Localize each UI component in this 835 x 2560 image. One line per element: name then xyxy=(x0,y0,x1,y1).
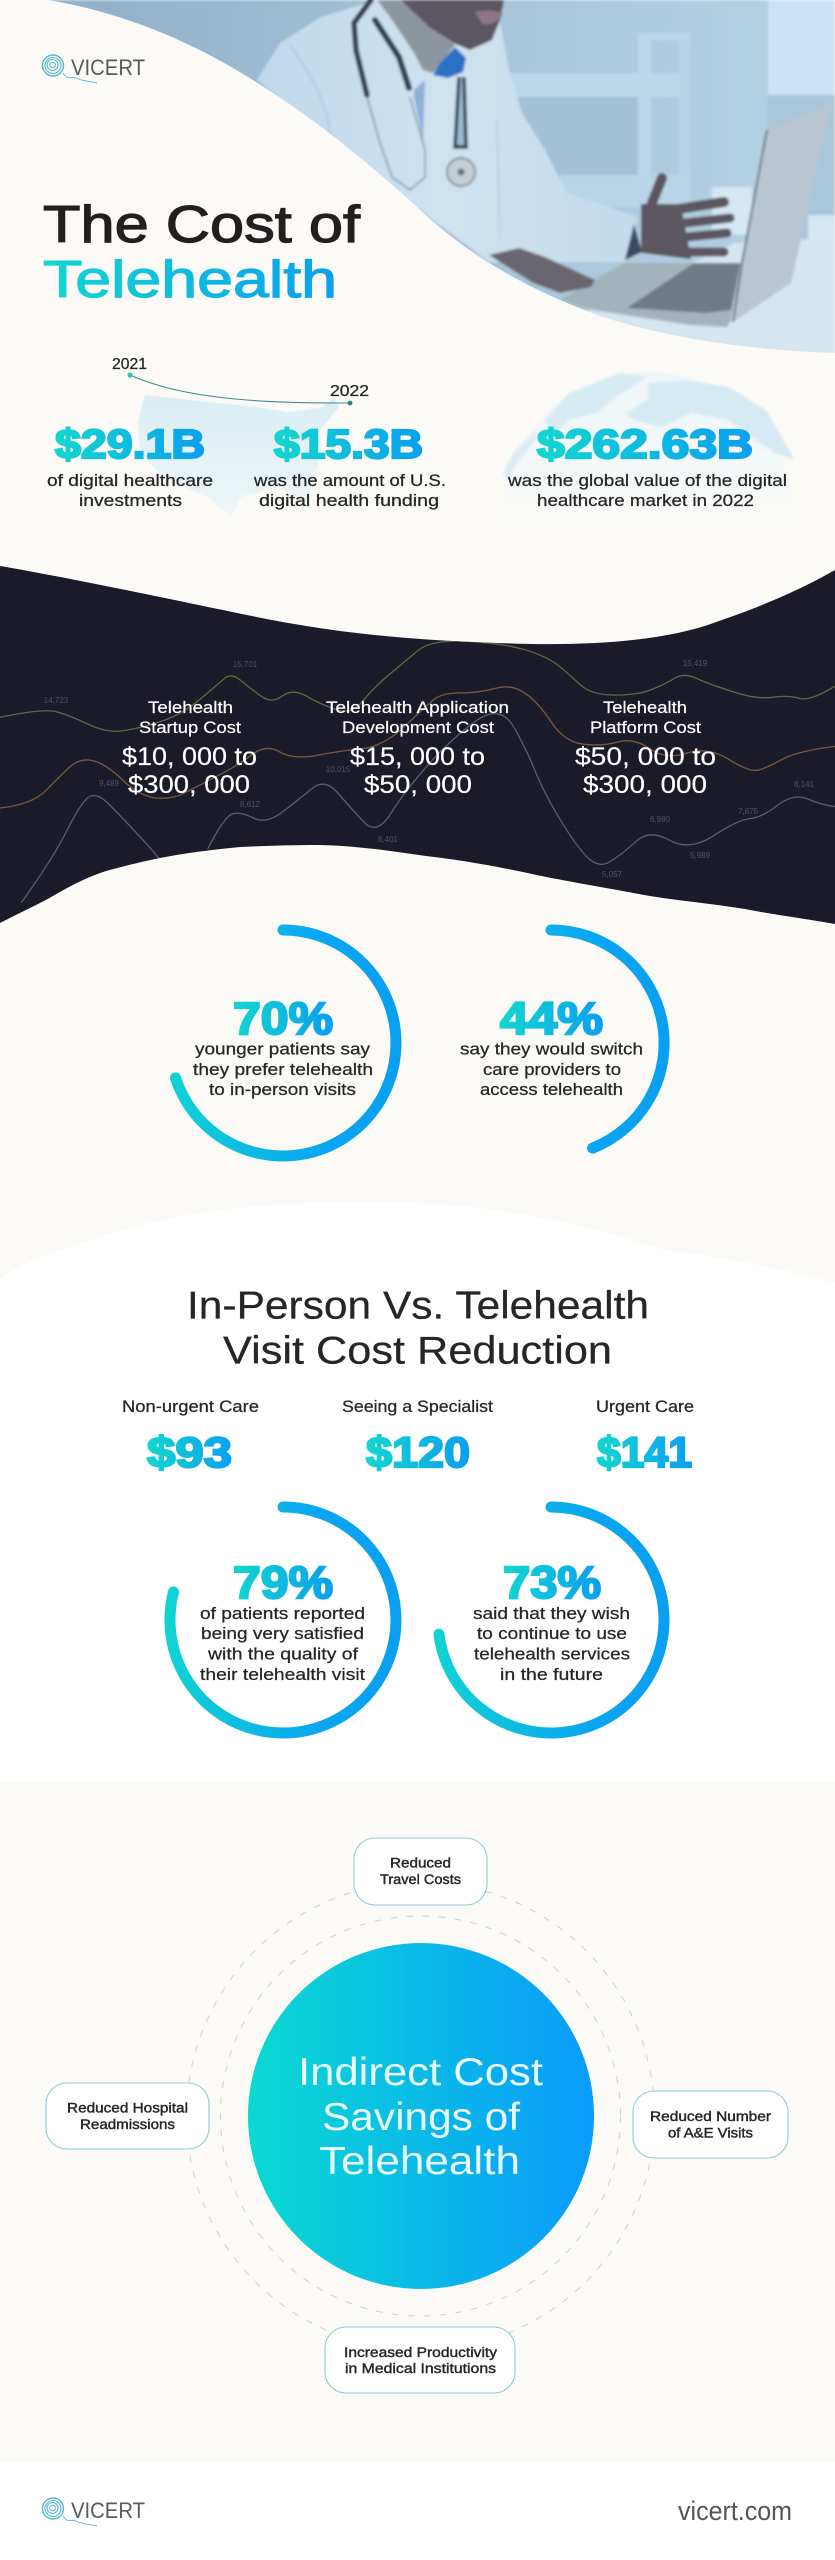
stat: $29.1B: of digital healthcare xyxy=(47,472,213,490)
stat: $262.63B: was the global value of the digital xyxy=(507,472,787,490)
stat: $15.3B: was the amount of U.S. xyxy=(253,472,446,490)
coat xyxy=(257,0,638,262)
laptop screen xyxy=(733,103,832,322)
ring stat: 73%: telehealth services xyxy=(474,1646,630,1664)
laptop base xyxy=(560,263,742,327)
chart lines xyxy=(0,641,835,903)
heading: visit cost reduction xyxy=(187,1284,649,1372)
chart value labels: 10,015 xyxy=(326,765,351,774)
ring stat: 79%: of patients reported xyxy=(200,1605,365,1623)
chart value labels: 6,401 xyxy=(378,835,399,844)
cost: startup: $300, 000 xyxy=(128,771,250,799)
white wave section xyxy=(0,1202,835,1782)
centre circle: indirect cost savings: Telehealth xyxy=(319,2140,520,2183)
cost: application development: $15, 000 to xyxy=(350,743,485,771)
heading: visit cost reduction: Visit Cost Reduction xyxy=(223,1330,612,1372)
ring stat: 73%: to continue to use xyxy=(477,1625,627,1643)
saving: urgent care: Urgent Care xyxy=(596,1398,694,1416)
centre circle: indirect cost savings: Indirect Cost xyxy=(298,2051,543,2094)
chart value labels: 8,141 xyxy=(794,780,815,789)
title xyxy=(43,196,361,309)
cost: startup: $10, 000 to xyxy=(122,743,257,771)
saving: non-urgent care xyxy=(122,1398,259,1477)
scarf xyxy=(377,0,455,73)
chart value labels: 8,612 xyxy=(240,800,261,809)
cost: startup: Startup Cost xyxy=(139,718,241,737)
timeline arc 2021 to 2022: 2022 xyxy=(330,383,369,400)
stat: $29.1B xyxy=(47,421,213,510)
ring stat: 44%: say they would switch xyxy=(460,1040,643,1058)
chart value labels: 7,875 xyxy=(738,807,759,816)
map: United States xyxy=(138,395,339,517)
hand on laptop xyxy=(489,248,595,293)
title: The Cost of xyxy=(43,196,361,254)
stat: $262.63B: healthcare market in 2022 xyxy=(537,492,754,510)
callout: reduced hospital readmissions xyxy=(46,2083,209,2149)
callout: increased productivity xyxy=(325,2327,515,2393)
chart value labels: 5,989 xyxy=(690,851,711,860)
ring stat: 44%: care providers to xyxy=(483,1061,621,1079)
chart value labels: 14,723 xyxy=(44,696,69,705)
stat: $29.1B: investments xyxy=(79,492,182,510)
callout: reduced travel costs: Reduced xyxy=(390,1856,451,1870)
cost: application development: $50, 000 xyxy=(364,771,472,799)
callout: reduced hospital readmissions: Readmissions xyxy=(80,2117,175,2132)
ring stat: 73%: said that they wish xyxy=(473,1605,630,1623)
stat: $262.63B: $262.63B xyxy=(537,421,753,467)
dark cost band xyxy=(0,560,835,930)
map: globe xyxy=(503,372,794,517)
callout: increased productivity: in Medical Institutions xyxy=(345,2361,496,2376)
callout: reduced A&E visits xyxy=(633,2091,788,2158)
ring stat: 79%: with the quality of xyxy=(207,1646,358,1664)
callout: reduced travel costs xyxy=(354,1838,487,1905)
cost: platform xyxy=(575,698,716,799)
cost: platform: Platform Cost xyxy=(590,718,701,737)
ring stat: 70% xyxy=(176,930,396,1156)
ring stat: 70%: younger patients say xyxy=(195,1040,371,1058)
shelf xyxy=(569,98,637,174)
saving: urgent care: $141 xyxy=(597,1429,692,1477)
chart value labels: 5,057 xyxy=(602,870,623,879)
ring stat: 79%: 79% xyxy=(233,1557,333,1608)
stat: $15.3B: digital health funding xyxy=(259,492,439,510)
saving: non-urgent care: $93 xyxy=(147,1429,232,1477)
chart value labels xyxy=(44,659,815,879)
cost: platform: Telehealth xyxy=(603,698,687,717)
cost: startup xyxy=(122,698,257,799)
cost: platform: $50, 000 to xyxy=(575,743,716,771)
cost: startup: Telehealth xyxy=(148,698,233,717)
stat: $29.1B: $29.1B xyxy=(55,421,205,467)
ring stat: 79% xyxy=(170,1507,396,1733)
footer xyxy=(0,2462,835,2560)
chart value labels: 15,701 xyxy=(233,660,258,669)
cuff xyxy=(625,224,642,260)
ring stat: 73%: 73% xyxy=(503,1557,601,1608)
saving: non-urgent care: Non-urgent Care xyxy=(122,1398,259,1416)
shirt collar xyxy=(433,47,466,78)
title: Telehealth xyxy=(43,251,337,309)
ring stat: 44%: 44% xyxy=(500,993,603,1044)
stat: $15.3B: $15.3B xyxy=(274,421,423,467)
stat: $262.63B xyxy=(507,421,787,510)
ring stat: 44%: access telehealth xyxy=(480,1081,623,1099)
callout: reduced A&E visits: Reduced Number xyxy=(650,2109,772,2124)
ring stat: 79%: their telehealth visit xyxy=(200,1666,365,1684)
timeline arc 2021 to 2022 xyxy=(112,356,369,405)
saving: seeing a specialist xyxy=(342,1398,493,1477)
heading: visit cost reduction: In-Person Vs. Telehealth xyxy=(187,1284,649,1328)
face and neck xyxy=(401,0,504,50)
ring stat: 44% xyxy=(460,930,664,1148)
dashed orbit circles xyxy=(186,1882,654,2350)
saving: seeing a specialist: $120 xyxy=(366,1429,470,1477)
logo: footer xyxy=(42,2498,145,2526)
cost: application development: Development Cost xyxy=(342,718,494,737)
chart value labels: 9,489 xyxy=(99,779,120,788)
callout: reduced travel costs: Travel Costs xyxy=(380,1872,461,1887)
chart value labels: 15,419 xyxy=(683,659,708,668)
gesturing hand xyxy=(642,178,730,258)
ring stat: 73% xyxy=(439,1507,664,1733)
callout: reduced A&E visits: of A&E Visits xyxy=(668,2126,753,2140)
cost: platform: $300, 000 xyxy=(583,771,707,799)
centre circle: indirect cost savings: Savings of xyxy=(322,2096,520,2139)
callout: reduced hospital readmissions: Reduced Hospital xyxy=(67,2100,188,2116)
callout: increased productivity: Increased Productivity xyxy=(344,2345,497,2360)
stat: $15.3B xyxy=(253,421,446,510)
ring stat: 70%: to in-person visits xyxy=(209,1081,356,1099)
saving: seeing a specialist: Seeing a Specialist xyxy=(342,1398,493,1416)
timeline arc 2021 to 2022: 2021 xyxy=(112,356,147,373)
table xyxy=(586,238,835,353)
ring stat: 79%: being very satisfied xyxy=(201,1625,364,1643)
chart value labels: 6,980 xyxy=(650,815,671,824)
stethoscope xyxy=(354,0,371,95)
hero photo: doctor at laptop xyxy=(0,0,835,360)
centre circle: indirect cost savings xyxy=(248,1943,594,2289)
saving: urgent care xyxy=(596,1398,694,1477)
ring stat: 70%: 70% xyxy=(233,993,333,1044)
footer: vicert.com xyxy=(678,2496,792,2526)
cost: application development xyxy=(326,698,509,799)
ring stat: 73%: in the future xyxy=(500,1666,603,1684)
logo: top xyxy=(42,55,145,83)
ring stat: 70%: they prefer telehealth xyxy=(193,1061,373,1079)
cost: application development: Telehealth Application xyxy=(326,698,509,717)
